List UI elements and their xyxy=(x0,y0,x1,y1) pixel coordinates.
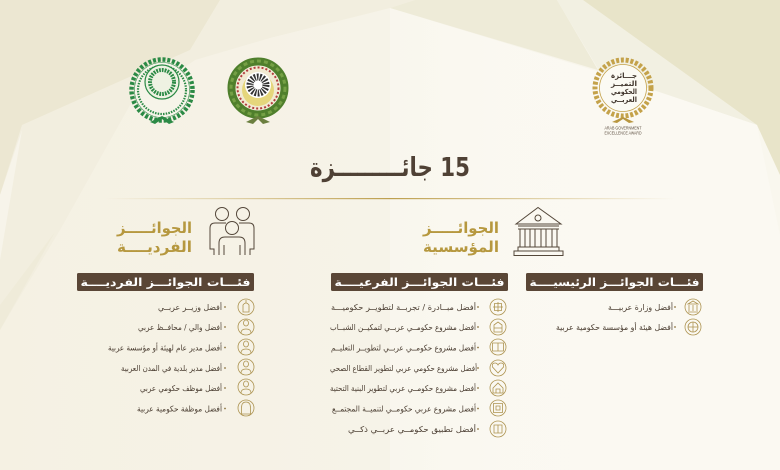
item: health sector: أفضل مشروع حكومي عربي لتطوير القطاع الصحي xyxy=(330,363,477,373)
logo: Arab Government Excellence Award: التميــز xyxy=(610,80,637,88)
logo: Arab Government Excellence Award: ARAB GOVERNMENT xyxy=(604,126,642,130)
item: best director general: أفضل مدير عام لهيئة أو مؤسسة عربية xyxy=(108,342,222,352)
panel heading: فئـــات الجوائـــز الفرديــــة xyxy=(80,276,250,289)
heading: individual awards: الجوائـــــز xyxy=(116,219,192,237)
item: best Arab ministry xyxy=(608,299,701,315)
logo: Arab Government Excellence Award: جـــائزة xyxy=(611,72,637,80)
logo: Arab Government Excellence Award: EXCELLENCE AWARD xyxy=(604,130,642,136)
heading: institutional awards xyxy=(422,219,499,256)
icon: group of people xyxy=(210,208,254,255)
item: best female government employee xyxy=(137,400,254,416)
item: best Arab ministry: أفضل وزارة عربيـــة xyxy=(608,302,673,312)
item: infrastructure xyxy=(330,380,506,396)
item: best government authority xyxy=(556,319,701,335)
logo: Arab Government Excellence Award: العربــي xyxy=(611,96,637,104)
item: education: أفضل مشروع حكومــي عربــي لتطويــر التعليــم xyxy=(331,342,476,352)
logo: Arab Government Excellence Award: الحكومي xyxy=(611,88,637,96)
panel heading xyxy=(77,273,254,291)
item: best Arab minister xyxy=(158,299,254,315)
title: 15 جائـــــــــزة xyxy=(310,153,470,183)
item: best governor: أفضل والي / محافــظ عربي xyxy=(138,322,222,332)
panel heading: فئـــات الجوائـــز الفرعيــــة xyxy=(334,276,504,289)
logo: Arab Government Excellence Award xyxy=(595,60,651,136)
item: best government employee xyxy=(140,379,254,395)
item: youth empowerment xyxy=(330,319,506,335)
item: best governor xyxy=(138,319,254,335)
item: best municipal director: أفضل مدير بلدية في المدن العربية xyxy=(121,363,222,373)
heading: individual awards xyxy=(116,219,192,256)
item: best initiative xyxy=(331,299,506,315)
item: smart application xyxy=(348,421,506,437)
item: best government authority: أفضل هيئة أو مؤسسة حكومية عربية xyxy=(556,322,673,332)
heading: institutional awards: الجوائـــــز xyxy=(422,219,499,237)
item: health sector xyxy=(330,360,506,376)
icon: institution building xyxy=(514,208,563,256)
logo: Arab League emblem xyxy=(231,61,285,124)
item: best director general xyxy=(108,339,254,355)
item: education xyxy=(331,339,506,355)
panel heading: فئـــات الجوائـــز الرئيسيــــة xyxy=(530,276,700,289)
panel heading xyxy=(331,273,508,291)
item: best Arab minister: أفضل وزيــر عربــي xyxy=(158,302,222,312)
panel heading xyxy=(526,273,703,291)
heading: individual awards: الفرديــــة xyxy=(117,238,192,256)
panel: sub awards categories xyxy=(330,273,508,437)
item: community development xyxy=(332,400,506,416)
item: infrastructure: أفضل مشروع حكومــي عربي لتطوير البنية التحتية xyxy=(330,383,476,393)
logo: organization emblem xyxy=(132,60,192,124)
item: youth empowerment: أفضل مشروع حكومــي عربــي لتمكيــن الشبــاب xyxy=(330,322,476,332)
item: best municipal director xyxy=(121,359,254,375)
divider xyxy=(105,198,675,199)
item: community development: أفضل مشروع عربي حكومــي لتنميــة المجتمــع xyxy=(332,404,476,414)
item: best female government employee: أفضل موظفة حكومية عربية xyxy=(137,404,222,414)
panel: main awards categories xyxy=(526,273,703,335)
item: best initiative: أفضل مبــادرة / تجربــة لتطويــر حكوميـــة xyxy=(331,302,476,312)
item: best government employee: أفضل موظف حكومي عربي xyxy=(140,383,222,393)
heading: institutional awards: المؤسسية xyxy=(423,238,499,256)
panel: individual awards categories xyxy=(77,273,254,416)
item: smart application: أفضل تطبيق حكومــي عربــي ذكــي xyxy=(348,424,476,434)
